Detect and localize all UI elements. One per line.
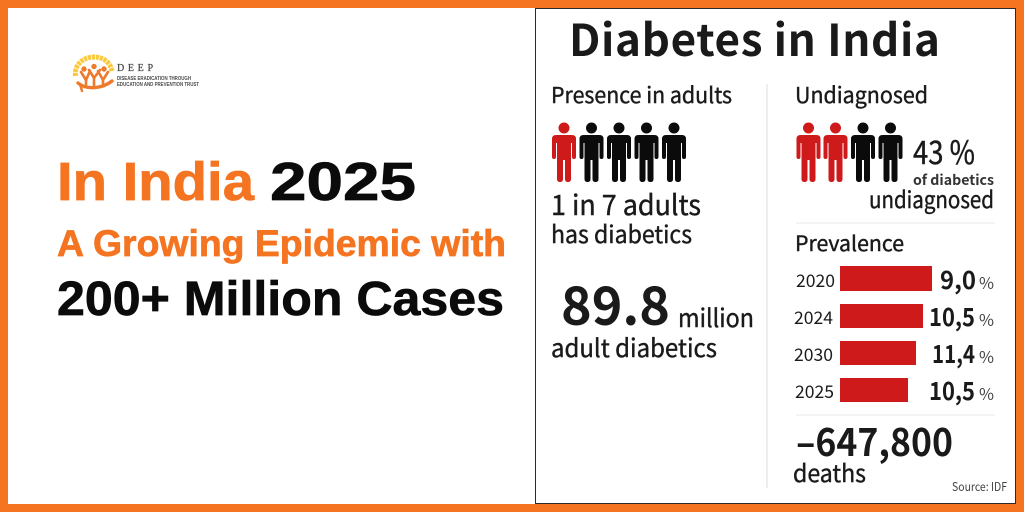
heading: In India 2025: In India [57,152,255,212]
stat: 89.8 million: 89.8 [561,265,670,341]
stat: deaths [793,412,953,489]
section: presence in adults [551,78,754,365]
icon: people and boat [78,65,112,91]
logo tagline [117,76,199,88]
section: prevalence bar chart [794,228,994,408]
bar row 2020: 2020 [796,268,835,293]
heading: 200+ Million Cases: 200+ Million Cases [57,273,504,326]
bar row 2024 [794,298,994,334]
heading: In India 2025: 2025 [270,152,416,212]
heading: A Growing Epidemic with: A Growing Epidemic with [57,223,506,264]
logo: DEEP trust [75,57,199,91]
stat: 89.8 million: million [678,299,754,335]
bar row 2030 [794,335,994,371]
stat: deaths: –647,800 [796,412,953,467]
heading: Prevalence [795,228,904,258]
title: Diabetes in India [569,5,940,69]
panel: left headline [8,8,535,504]
logo tagline: DISEASE ERADICATION THROUGH [117,76,191,82]
bar row 2025 [795,372,994,408]
icon row: 1 of 5 people highlighted [552,122,686,182]
stat: 89.8 million [561,265,754,341]
stat: 43%: 43 % [913,128,975,174]
bar row 2024: 10,5 [929,298,975,334]
logo name: DEEP [117,63,153,74]
bar row 2025: 2025 [795,379,834,404]
text: has diabetics: has diabetics [551,215,692,250]
text: adult diabetics: adult diabetics [551,329,717,365]
text: 1 in 7 adults: 1 in 7 adults [551,184,701,224]
bar row 2030: % [979,344,994,368]
text: of diabetics: of diabetics [913,170,994,190]
bar row 2024: 2024 [794,305,833,330]
section: undiagnosed [795,78,994,215]
bar row 2030: 2030 [794,342,833,367]
heading: Presence in adults [551,78,732,110]
bar row 2020: % [979,270,994,294]
logo tagline: EDUCATION AND PREVENTION TRUST [117,82,199,88]
panel: Diabetes in India [536,5,1016,504]
bar row 2020: 9,0 [940,261,976,297]
text: undiagnosed: undiagnosed [869,181,994,215]
bar row 2024: % [979,307,994,331]
stat: deaths: deaths [793,454,866,489]
heading: Undiagnosed [795,78,928,110]
bar row 2020 [796,261,994,297]
icon row: 2 of 4 people highlighted [796,122,902,182]
icon: sun rays arc [75,57,112,76]
bar row 2025: 10,5 [929,372,975,408]
bar row 2030: 11,4 [932,335,975,371]
bar row 2025: % [979,381,994,405]
source note: Source: IDF [952,478,1007,495]
heading: In India 2025 [57,152,416,212]
